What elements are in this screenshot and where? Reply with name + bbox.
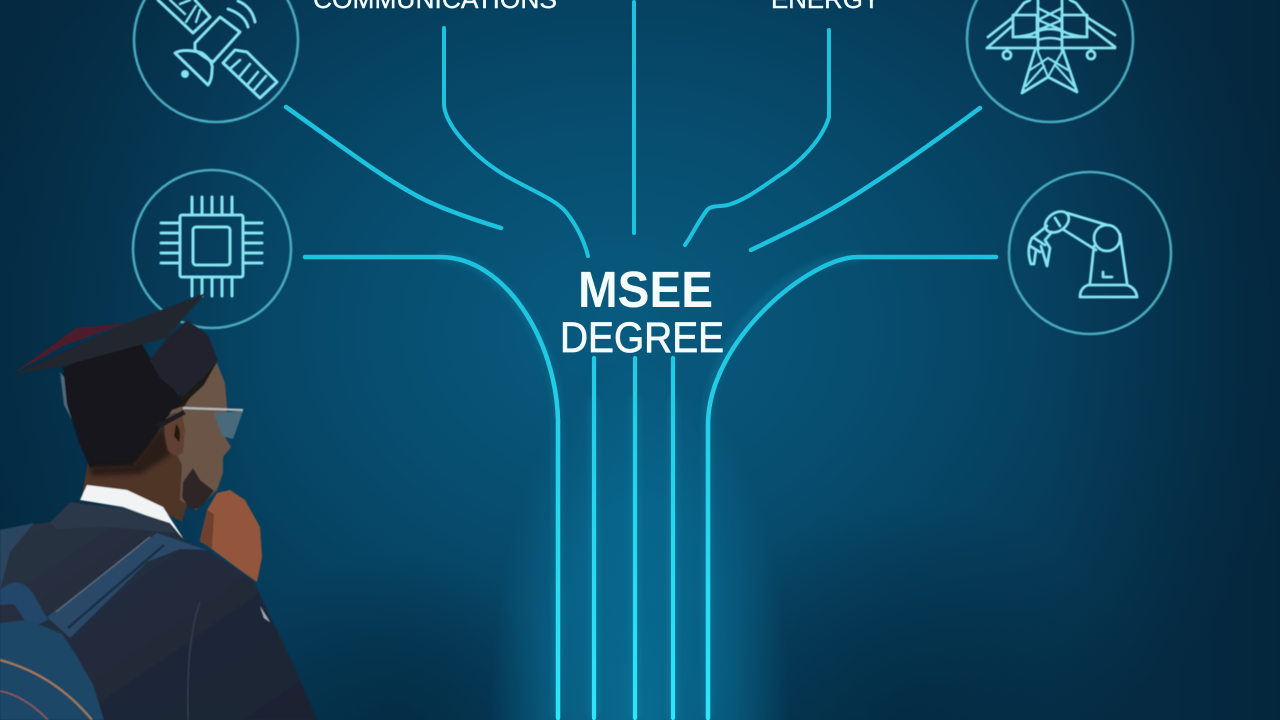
cap board	[13, 293, 206, 375]
backpack orange trim	[0, 660, 92, 720]
cap red stripe	[14, 323, 127, 373]
line: central branch	[632, 2, 636, 233]
hair	[63, 340, 186, 468]
line: satellite branch	[286, 107, 501, 228]
icon: robot arm	[1009, 172, 1171, 334]
glasses	[155, 408, 243, 439]
hair fade on neck	[88, 424, 170, 476]
line: robot branch	[708, 257, 996, 718]
jacket seam	[188, 602, 200, 720]
hand	[200, 490, 262, 582]
glow behind connector lines	[440, 257, 860, 715]
backpack lower trim	[0, 691, 48, 720]
strap dark groove	[68, 545, 164, 628]
title: MSEE: MSEE	[578, 261, 713, 318]
icon: satellite	[134, 0, 298, 122]
fingers shade	[200, 510, 214, 548]
jacket collar	[50, 503, 175, 533]
neck	[82, 425, 196, 522]
ear	[164, 413, 185, 456]
beard	[182, 468, 214, 510]
backpack body	[0, 620, 104, 720]
face	[170, 363, 231, 510]
line: tower branch	[751, 108, 980, 250]
connector lines from MSEE degree to fields	[286, 2, 996, 718]
hair edge highlight	[60, 372, 72, 420]
lines: three vertical trunks	[594, 358, 673, 718]
line: energy branch	[685, 30, 829, 245]
backpack strap front	[47, 533, 207, 638]
icon circles and glyphs	[133, 0, 1171, 334]
subtitle: DEGREE: DEGREE	[560, 314, 724, 362]
badge	[260, 606, 270, 622]
icon: microchip	[133, 170, 291, 328]
cap body	[150, 320, 218, 397]
temple hair	[178, 362, 217, 408]
line: communications branch	[444, 28, 588, 256]
line: chip branch	[305, 257, 558, 718]
backpack top loop	[0, 582, 48, 628]
icon: transmission tower	[967, 0, 1133, 122]
strap stitching	[56, 537, 150, 612]
left shoulder strap	[0, 523, 34, 590]
student figure	[0, 293, 317, 720]
ear inner	[174, 424, 180, 442]
jacket	[0, 502, 317, 720]
shirt collar	[80, 485, 183, 538]
